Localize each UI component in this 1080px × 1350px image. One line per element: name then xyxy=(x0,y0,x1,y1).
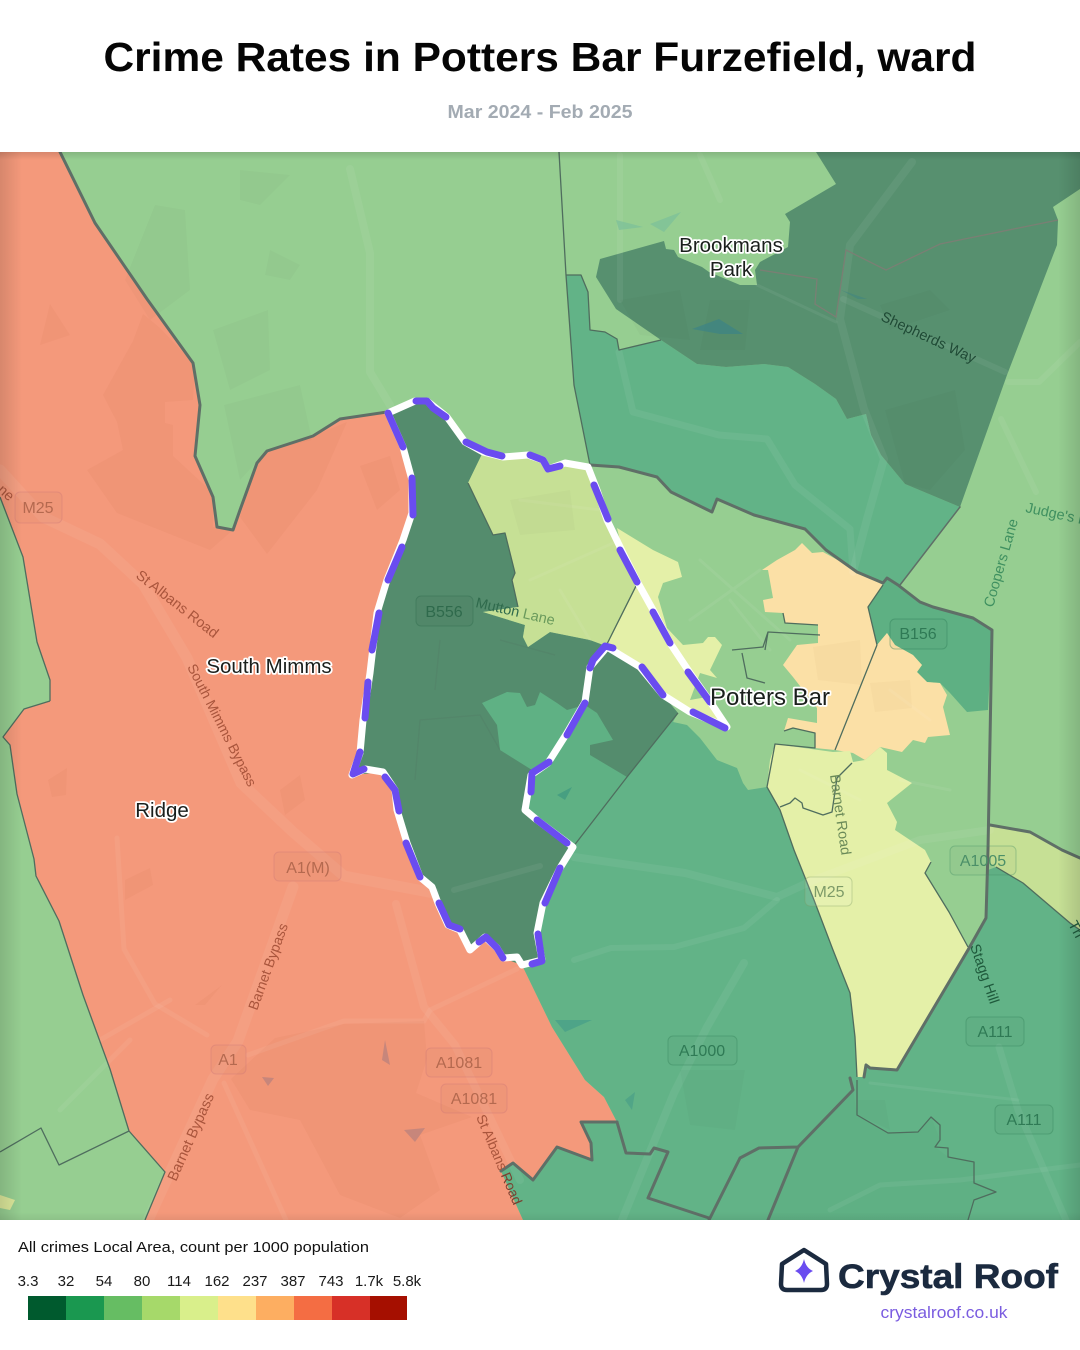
legend scale labels: 237 xyxy=(242,1273,268,1290)
road name labels xyxy=(0,309,1080,1207)
shield: A1005: A1005 xyxy=(960,853,1006,870)
place: Brookmans Park: Brookmans xyxy=(679,234,783,257)
lakes xyxy=(262,212,867,1142)
shield: A1005 xyxy=(950,846,1016,875)
district boundary lines xyxy=(60,152,1080,1220)
area: bottom right green shade xyxy=(768,1090,996,1220)
logo wordmark: Crystal Roof xyxy=(838,1258,1059,1296)
legend scale labels xyxy=(18,1273,422,1290)
shield: B156: B156 xyxy=(899,626,937,643)
road: South Mimms Bypass: South Mimms Bypass xyxy=(184,661,260,789)
road: St Albans Road south: St Albans Road xyxy=(473,1112,526,1207)
icon: house with sparkle xyxy=(781,1250,827,1290)
shield: M25 centre xyxy=(805,877,852,906)
shield: A1: A1 xyxy=(218,1052,238,1069)
road network xyxy=(154,158,1076,1220)
title: Crime Rates in Potters Bar Furzefield, ward xyxy=(104,34,976,80)
subtitle: date range: Mar 2024 - Feb 2025 xyxy=(448,101,632,122)
ward outline: white base xyxy=(352,401,727,965)
area: darkest green north-east xyxy=(596,152,1080,507)
area: ward dark green Furzefield xyxy=(352,401,678,965)
road: Barnet Bypass south: Barnet Bypass xyxy=(165,1091,218,1184)
legend scale labels: 54 xyxy=(96,1273,112,1290)
road: Coopers Lane: Coopers Lane xyxy=(981,517,1022,609)
ward outline: purple dashes xyxy=(353,401,725,964)
place: South Mimms: South Mimms xyxy=(206,655,332,678)
shield: A1081 lower: A1081 xyxy=(451,1091,497,1108)
area: pale lime far right xyxy=(988,825,1080,930)
shield: A1081 lower xyxy=(441,1084,507,1113)
area: pale yellow-green south of Potters Bar xyxy=(767,744,968,1077)
road: Mutton Lane: Mutton Lane xyxy=(474,595,556,629)
place: Brookmans Park xyxy=(679,234,783,281)
map edge vignette xyxy=(0,152,1080,1220)
legend scale labels: 743 xyxy=(318,1273,344,1290)
map area: base light green neighbourhoods xyxy=(0,152,1080,1220)
peach inner tan patches xyxy=(813,640,912,712)
road: Barnet Road: Barnet Road xyxy=(826,773,853,856)
shield: M25 west: M25 xyxy=(22,500,54,517)
place labels xyxy=(135,234,830,822)
place: Brookmans Park: Park xyxy=(710,258,753,281)
thin internal boundaries xyxy=(0,152,1080,1220)
area: pale yellow around ward edge xyxy=(606,528,727,727)
shield: M25 west xyxy=(15,492,62,523)
area: mid green patch inside the ward xyxy=(482,692,627,847)
legend scale labels: 387 xyxy=(280,1273,306,1290)
shield: A1000 xyxy=(668,1036,737,1065)
area: mid green north centre xyxy=(566,275,960,585)
legend title: All crimes Local Area, count per 1000 population xyxy=(18,1239,369,1256)
legend scale labels: 80 xyxy=(134,1273,150,1290)
area: B156 green xyxy=(868,578,992,712)
area: lime Mutton Lane xyxy=(468,452,637,647)
small lime patch bottom left xyxy=(0,1195,15,1210)
legend scale labels: 114 xyxy=(167,1273,191,1290)
choropleth map xyxy=(0,152,1080,1220)
shield: A111 lower: A111 xyxy=(1006,1112,1042,1129)
shield: M25 centre: M25 xyxy=(813,884,845,901)
place: Ridge: Ridge xyxy=(135,799,189,822)
place: Potters Bar: Potters Bar xyxy=(710,684,830,711)
road: St Albans Road west: St Albans Road xyxy=(133,568,221,642)
shield: A1081 upper xyxy=(426,1048,492,1077)
shield: A111 upper xyxy=(966,1017,1024,1046)
road: Shepherds Way: Shepherds Way xyxy=(878,309,979,367)
legend scale labels: 32 xyxy=(58,1273,74,1290)
shield: B556: B556 xyxy=(425,604,463,621)
shield: A111 lower xyxy=(995,1105,1053,1134)
orange land patches xyxy=(40,304,472,1218)
road: Barnet Bypass north: Barnet Bypass xyxy=(245,921,291,1012)
shield: A1081 upper: A1081 xyxy=(436,1055,482,1072)
shield: A1000: A1000 xyxy=(679,1043,725,1060)
legend scale labels: 5.8k xyxy=(393,1273,422,1290)
area: mid green south-east xyxy=(501,713,1080,1220)
area: peach high-crime Potters Bar centre xyxy=(762,543,950,760)
land texture patches xyxy=(125,170,965,1130)
legend scale labels: 1.7k xyxy=(355,1273,384,1290)
area: high-crime orange South Mimms and Ridge xyxy=(0,152,617,1220)
legend scale labels: 3.3 xyxy=(18,1273,38,1290)
road: Stagg Hill: Stagg Hill xyxy=(966,942,1002,1006)
shield: B556 xyxy=(416,596,473,626)
shield: A1 xyxy=(211,1045,246,1074)
website url: crystalroof.co.uk xyxy=(880,1303,1008,1322)
shield: B156 xyxy=(890,619,947,649)
shield: A1(M): A1(M) xyxy=(286,860,330,877)
road shields xyxy=(15,492,1053,1134)
shield: A111 upper: A111 xyxy=(978,1024,1013,1041)
logo: Crystal Roof xyxy=(781,1250,1059,1322)
reddish path through dark area xyxy=(760,220,1058,317)
legend scale labels: 162 xyxy=(204,1273,230,1290)
shield: A1(M) xyxy=(274,852,341,881)
legend colour bar xyxy=(28,1296,407,1320)
